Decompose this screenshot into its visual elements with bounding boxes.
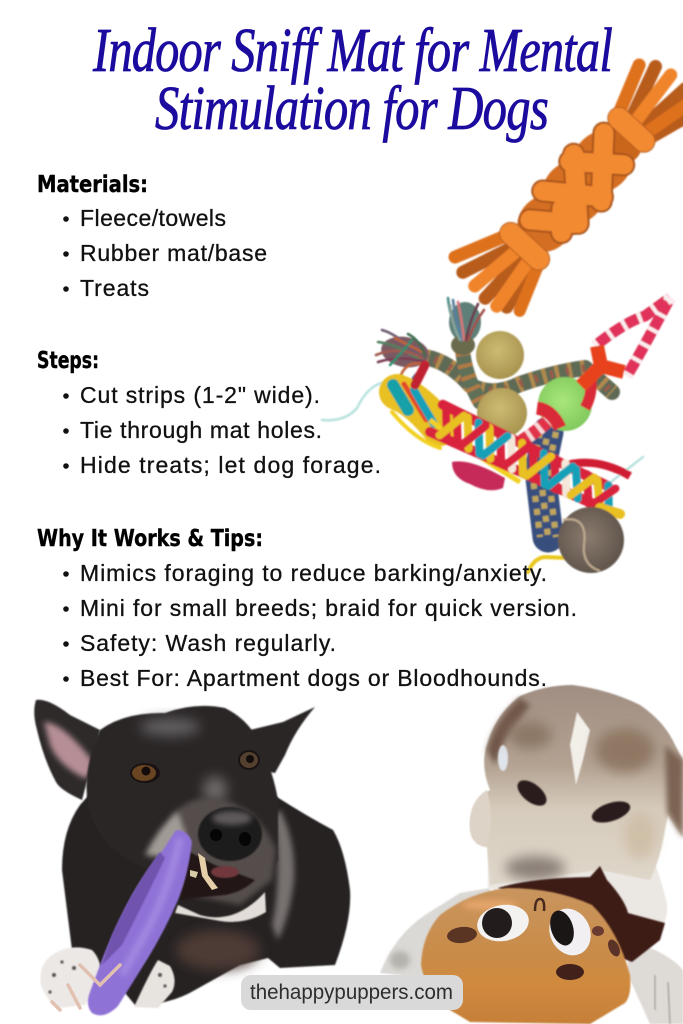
text: materials: Treats	[80, 275, 149, 301]
text: materials: Fleece/towels	[80, 205, 226, 231]
multicolour cotton rope	[425, 357, 612, 392]
nose	[198, 807, 262, 861]
balls	[476, 331, 524, 379]
text: steps: Steps:	[37, 348, 99, 374]
text: steps: Tie through mat holes.	[80, 417, 322, 443]
forehead highlights	[140, 718, 200, 736]
nose shadow	[505, 856, 565, 880]
text: materials: Rubber mat/base	[80, 240, 267, 266]
worn tennis ball	[558, 507, 624, 573]
right ear	[250, 707, 315, 773]
white front paws	[40, 947, 101, 1008]
title: Stimulation for Dogs	[155, 75, 548, 143]
plush cookie	[421, 888, 630, 1024]
text: materials	[37, 172, 267, 301]
text: steps: Cut strips (1-2" wide).	[80, 382, 320, 408]
head	[86, 706, 278, 890]
purple ring toy	[88, 830, 192, 1015]
ear shading	[487, 698, 530, 765]
claws	[52, 965, 120, 1010]
red ribbon	[563, 463, 630, 476]
pink and white loop	[595, 298, 670, 376]
head	[470, 685, 683, 885]
forehead blaze	[570, 712, 590, 785]
pink frayed tassel	[452, 461, 505, 490]
muzzle grey	[160, 798, 276, 905]
website badge	[241, 975, 463, 1010]
icon: orange braided rope toy	[448, 51, 683, 321]
photo: beagle with plush cookie toy	[380, 685, 683, 1024]
eyes	[130, 763, 160, 783]
text: why it works and tips: Safety: Wash regularly.	[80, 630, 336, 656]
red Y chew	[581, 346, 624, 386]
colourful main braid: crossing strands	[430, 405, 620, 515]
cookie chips	[446, 925, 478, 945]
flank highlight	[272, 810, 294, 940]
cookie eyes	[474, 901, 532, 945]
left paw and leg	[380, 888, 490, 985]
white chin	[175, 892, 266, 922]
left ear	[34, 700, 100, 800]
text: why it works and tips: Mimics foraging to reduce barking/anxiety.	[80, 560, 547, 586]
mouth	[180, 852, 255, 900]
toy hat	[498, 866, 665, 962]
text: steps: Hide treats; let dog forage.	[80, 452, 381, 478]
text: steps	[37, 348, 381, 478]
text: why it works and tips: Mini for small breeds; braid for quick version.	[80, 595, 577, 621]
text: why it works and tips	[37, 526, 577, 691]
colourful main braid: tied end	[397, 392, 440, 428]
blue and yellow rope	[540, 432, 548, 537]
text: why it works and tips: Why It Works & Tips:	[37, 526, 263, 552]
eyes	[513, 775, 551, 811]
chest brown shading	[176, 930, 260, 970]
red and white short rope	[518, 416, 553, 443]
muzzle fold	[470, 790, 491, 847]
title	[92, 17, 612, 143]
chest	[488, 830, 667, 930]
right paw and leg	[628, 945, 683, 1024]
text: why it works and tips: Best For: Apartment dogs or Bloodhounds.	[80, 665, 547, 691]
thin strings	[322, 382, 643, 572]
icon: multicolour rope toys with balls	[322, 298, 670, 573]
photo: black dog with purple ring toy	[34, 700, 350, 1015]
dog body	[62, 760, 350, 1005]
knotted tassels	[379, 333, 431, 371]
text: materials: Materials:	[37, 172, 148, 198]
website badge: thehappypuppers.com	[250, 981, 453, 1004]
